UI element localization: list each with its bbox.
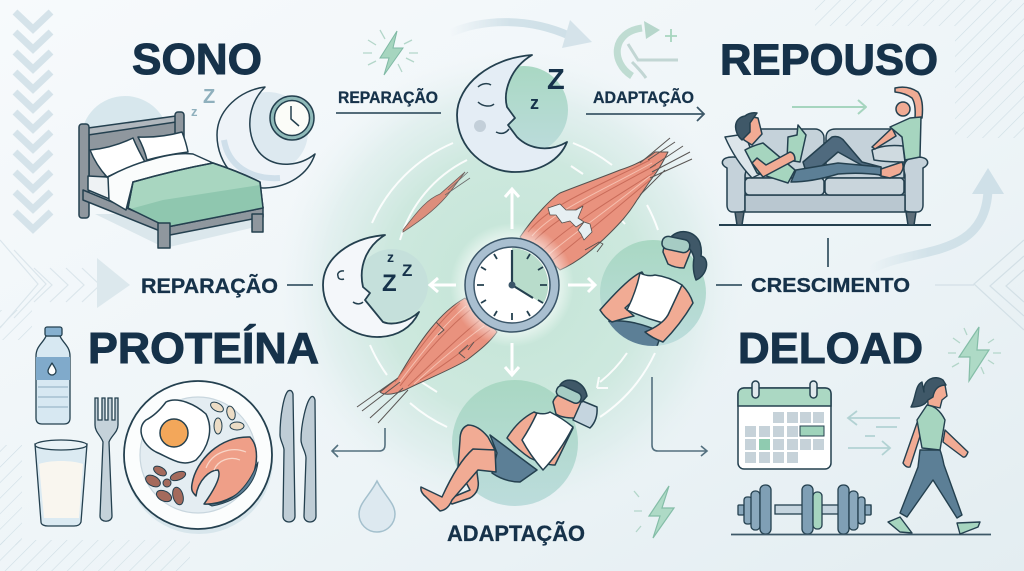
icon: knives — [280, 390, 316, 522]
icon: water bottle — [36, 327, 70, 424]
heading: DELOAD: DELOAD — [738, 324, 923, 373]
muscle: small fibre — [403, 172, 470, 232]
label: bottom adaptação: ADAPTAÇÃO — [447, 521, 585, 546]
decorative arrow: left — [0, 240, 130, 328]
label: top reparação: REPARAÇÃO — [338, 87, 438, 107]
muscle: lower — [357, 298, 497, 423]
icon: fork — [95, 398, 118, 521]
label: top reparação — [336, 87, 441, 113]
man resting: bottom — [421, 380, 597, 511]
label: crescimento: CRESCIMENTO — [751, 275, 910, 297]
icon: glass of milk — [35, 440, 87, 526]
icon: walking woman — [888, 378, 980, 534]
icon: bolt bottom — [634, 486, 674, 538]
clock — [450, 223, 574, 347]
icon: sofa with person — [719, 87, 931, 225]
icon: left moon z's — [382, 249, 412, 297]
icon: plate with food — [124, 381, 273, 534]
decorative chevrons: right — [935, 240, 1024, 330]
connector: bottom left — [332, 428, 385, 457]
icon: left moon z's: Z — [402, 261, 412, 280]
icon: recovery seat with arrow — [617, 21, 678, 78]
woman resting: right — [600, 232, 707, 352]
icon: top moon z's: z — [530, 93, 539, 113]
heading: SONO: SONO — [132, 35, 262, 84]
teal circles — [356, 66, 706, 506]
arrows: deload — [848, 411, 900, 455]
icon: top moon — [457, 55, 567, 172]
icon: bolt right — [948, 327, 1001, 381]
icon: calendar — [738, 381, 831, 469]
floor line: deload — [731, 534, 991, 536]
white arrows from clock — [430, 189, 595, 375]
icon: left moon z's: Z — [382, 270, 397, 297]
icon: bed with moon and clock — [79, 87, 315, 248]
icon: left moon z's: z — [387, 249, 394, 265]
icon: sleep z's — [191, 86, 215, 119]
icon: left moon — [323, 235, 419, 337]
icon: dumbbell — [738, 485, 871, 534]
icon: top moon z's — [530, 64, 565, 113]
icon: water drop — [359, 481, 395, 532]
hatch: lower left — [0, 310, 190, 571]
label: top adaptação with arrow: ADAPTAÇÃO — [593, 87, 694, 107]
chevron column — [15, 12, 51, 229]
label: top adaptação with arrow — [586, 87, 704, 121]
muscle: upper torn — [520, 138, 692, 270]
icon: sleep z's: Z — [203, 86, 215, 108]
heading: PROTEÍNA: PROTEÍNA — [88, 323, 319, 373]
heading: REPOUSO: REPOUSO — [720, 36, 938, 84]
icon: top moon z's: Z — [547, 64, 565, 96]
connector: bottom right — [652, 377, 707, 456]
hatch: top right — [815, 0, 1024, 138]
center glow — [277, 50, 747, 520]
decorative arrow: right curve — [870, 168, 1004, 270]
white orbit arcs — [370, 143, 658, 427]
decorative arrow: top curve — [450, 20, 592, 48]
label: left reparação: REPARAÇÃO — [141, 275, 278, 298]
icon: sleep z's: z — [191, 104, 198, 119]
icon: bolt top — [363, 30, 418, 75]
